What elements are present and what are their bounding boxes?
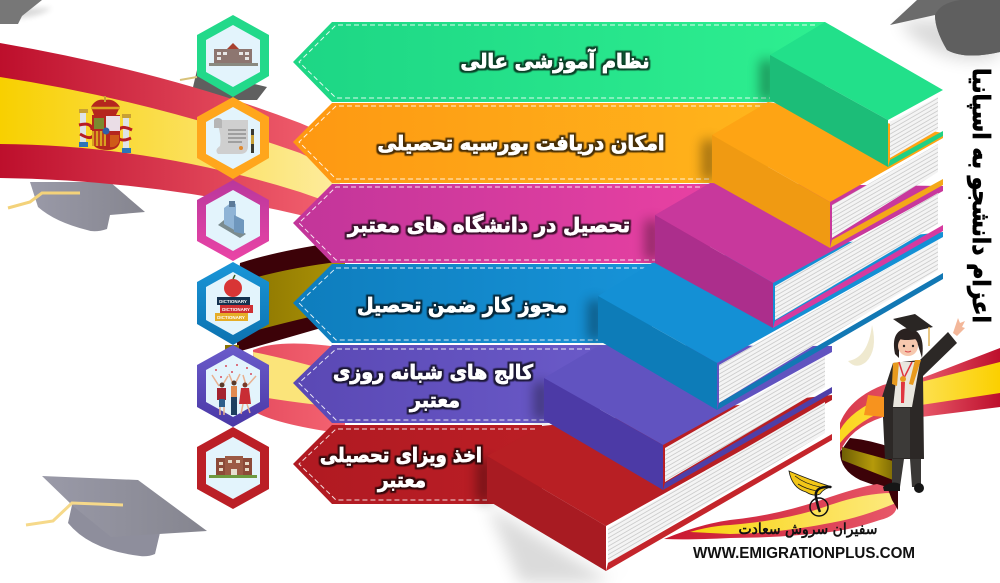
right ribbon with student [664,348,1000,539]
banner label 5: معتبر [409,388,460,412]
book shadows on banners [477,60,774,502]
ribbon lower fold [253,343,345,434]
logo: winged emblem [789,471,832,516]
website url: WWW.EMIGRATIONPLUS.COM [693,545,915,562]
graduate student figure [864,314,965,493]
graduation cap: bottom left [26,476,207,556]
graduation cap: under flag [8,182,145,231]
Spanish coat of arms [79,96,132,153]
banner label 3: تحصیل در دانشگاه های معتبر [347,213,630,237]
banner label 5: کالج های شبانه روزی [333,360,533,384]
hexagon icon: dictionary stack: DICTIONARY [219,299,247,304]
graduation cap: behind flag [180,70,267,100]
hexagon icon: scroll and pen [197,97,269,179]
banner label 1: نظام آموزشی عالی [460,48,650,73]
graduation cap: top left [0,0,52,24]
dark ribbon fold [225,241,345,353]
banner label 6: معتبر [377,468,426,492]
hexagon icon: dictionary stack: DICTIONARY [217,315,245,320]
banner 4: blue [293,264,652,343]
hexagon icon: dictionary stack [197,262,269,345]
banner 1: green [293,22,825,102]
book 2: orange [712,102,943,248]
book 4: blue [598,232,943,410]
small ivory cap fragment [848,325,874,366]
hexagon icon: celebrating students [197,345,269,427]
hexagon icon: skyscraper [197,180,269,261]
graduation cap: top right [890,0,1000,60]
banner label 5 [333,360,533,412]
book 6: red [487,395,832,571]
banner label 4: مجوز کار ضمن تحصیل [357,293,567,317]
hexagon icon: dictionary stack: DICTIONARY [222,307,250,312]
banner label 6: اخذ ویزای تحصیلی [320,443,482,467]
banner 5: purple [293,345,600,423]
book 3: magenta [655,183,943,328]
book 5: purple [544,345,832,490]
banner 2: orange [293,103,768,183]
ground shadow under book stack [487,505,640,583]
hexagon icon: college building [197,427,269,509]
hexagon icon: building [197,15,269,97]
banner 3: magenta [293,184,710,263]
title: vertical: اعزام دانشجو به اسپانیا [967,68,995,323]
banner label 2: امکان دریافت بورسیه تحصیلی [378,131,664,155]
banner 6: red [293,425,542,504]
logo: company name: سفیران سروش سعادت [738,520,878,538]
banner label 6 [320,443,482,492]
Spanish flag ribbon: left [0,43,340,230]
book 1: green [770,22,943,167]
